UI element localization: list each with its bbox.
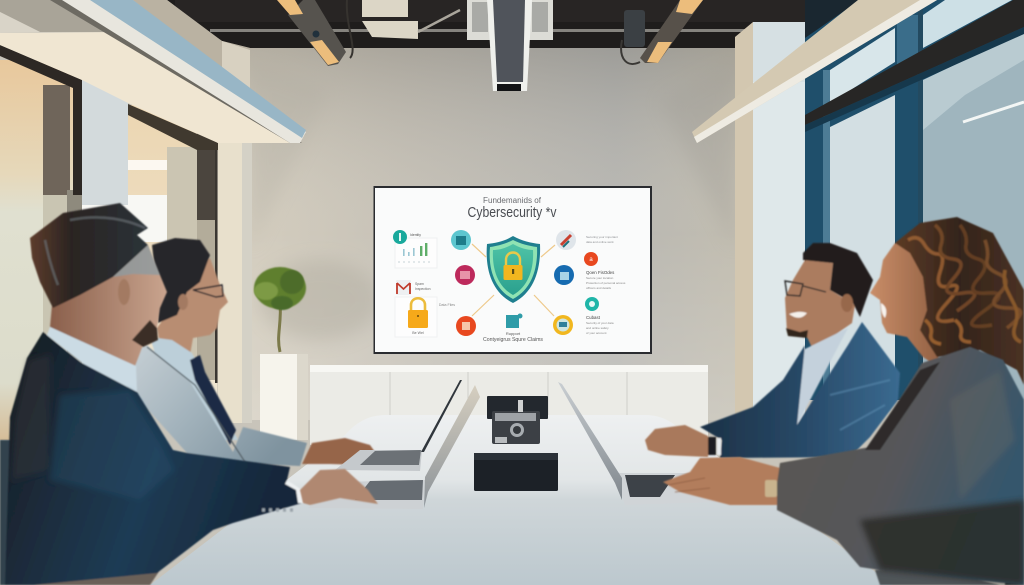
hair [30, 203, 148, 308]
text block: lower right: and online safety [586, 326, 609, 330]
shirt collar [47, 327, 137, 392]
panel: bar chart card [393, 230, 437, 268]
door pane [0, 60, 73, 440]
curls [908, 225, 1021, 344]
screen title: Cybersecurity *v [468, 205, 557, 221]
cuff [285, 480, 304, 503]
icon: square at bottom centre [506, 314, 522, 328]
text block: middle right: Protection of personal access [586, 281, 626, 285]
ear [841, 294, 853, 312]
beard [132, 320, 158, 347]
hair [152, 238, 210, 323]
glasses [785, 281, 826, 296]
smile [881, 303, 886, 318]
tie [190, 355, 236, 445]
icon: orange circle [456, 316, 476, 336]
hair [895, 217, 1024, 385]
icon: mail envelope: Spam [415, 282, 424, 286]
jacket [777, 347, 1024, 585]
icon: blue circle [554, 265, 574, 285]
face [157, 258, 228, 355]
glasses [193, 285, 223, 297]
text block: lower right: Cubast [586, 315, 601, 320]
label: bottom centre: Rupport [506, 331, 521, 336]
sleeve buttons [262, 508, 294, 512]
centre device [492, 400, 540, 444]
label: bottom centre [483, 331, 544, 343]
screen title [468, 196, 557, 221]
icon: yellow circle [553, 315, 573, 335]
chair [0, 440, 10, 585]
hand and watch [645, 425, 708, 457]
wall screen [374, 186, 652, 354]
text block: middle right: officers and details [586, 286, 611, 290]
hair highlights [45, 217, 145, 285]
glass pane [82, 105, 217, 405]
screen title: Fundemanids of [483, 196, 542, 205]
text block: top right [586, 235, 618, 244]
person: man in navy suit at right [645, 243, 900, 458]
ear [178, 294, 188, 310]
text block: middle right: a [589, 257, 593, 263]
laptop front left [308, 385, 480, 509]
text block: top right: data and online work [586, 240, 614, 244]
laptop rear left [335, 380, 462, 471]
beige wall behind duct [133, 0, 306, 135]
smile [789, 312, 807, 318]
neck and face [50, 245, 167, 366]
icon: crimson circle [455, 265, 475, 285]
pillar [218, 143, 242, 423]
black box front [474, 453, 558, 491]
panel: padlock card: Data Files [439, 303, 455, 307]
ear [118, 279, 130, 305]
connector arrows [472, 244, 555, 316]
hand of man in dark suit [300, 469, 378, 505]
beard [786, 328, 808, 338]
left soffit and glass partitions [0, 0, 306, 450]
second frame [128, 104, 218, 150]
table [150, 415, 893, 585]
top-left upper wall [0, 0, 135, 32]
door frame [0, 45, 82, 195]
plant pedestal [260, 354, 308, 440]
panel: padlock card [395, 297, 455, 337]
ceiling light right [621, 0, 703, 64]
credenza [310, 365, 708, 445]
text block: lower right [585, 297, 614, 335]
column [82, 80, 128, 205]
projector [362, 0, 460, 39]
text block: lower right: of your account [586, 331, 607, 335]
plant [254, 267, 306, 352]
back wall [210, 30, 750, 420]
laptop right [558, 382, 720, 505]
face [785, 260, 855, 350]
person: man in dark suit at left [0, 203, 304, 585]
icon: mail envelope [396, 280, 431, 295]
ceiling vent and centre beam [467, 0, 553, 91]
hands [663, 457, 780, 505]
ceiling light left [277, 0, 353, 66]
hair [803, 243, 873, 317]
person: man in grey suit [125, 238, 383, 466]
right ceiling duct [692, 0, 937, 143]
panel: bar chart card: Identity [410, 233, 421, 237]
icon: teal circle building [451, 230, 471, 250]
soffit [0, 32, 290, 143]
shirt [150, 337, 238, 440]
text block: lower right: Security of your data [586, 321, 614, 325]
text block: middle right: Secure your location [586, 276, 614, 280]
windows [805, 0, 1024, 400]
hand [302, 438, 383, 465]
central shield with padlock [487, 236, 540, 303]
watch [765, 480, 777, 497]
icon: mail envelope: Inspection [415, 287, 431, 291]
text block: middle right: Qoen FisOdes [586, 270, 615, 275]
dark box rear [487, 396, 548, 419]
grey suit [125, 345, 307, 466]
icon: grey circle with key [556, 230, 576, 250]
suit [5, 332, 302, 585]
shirt [790, 328, 848, 425]
ceiling [167, 0, 825, 48]
text block: middle right [584, 252, 626, 290]
neck and face [870, 243, 950, 365]
right wall pillar [735, 22, 805, 422]
label: bottom centre: Contyeigrus Squre Claims [483, 337, 544, 343]
left ceiling duct [50, 0, 306, 143]
text block: top right: Securing your important [586, 235, 618, 239]
panel: padlock card: Be Wel [412, 331, 424, 335]
suit [700, 322, 900, 458]
chair [875, 570, 1000, 585]
person: woman in grey jacket [663, 217, 1024, 585]
